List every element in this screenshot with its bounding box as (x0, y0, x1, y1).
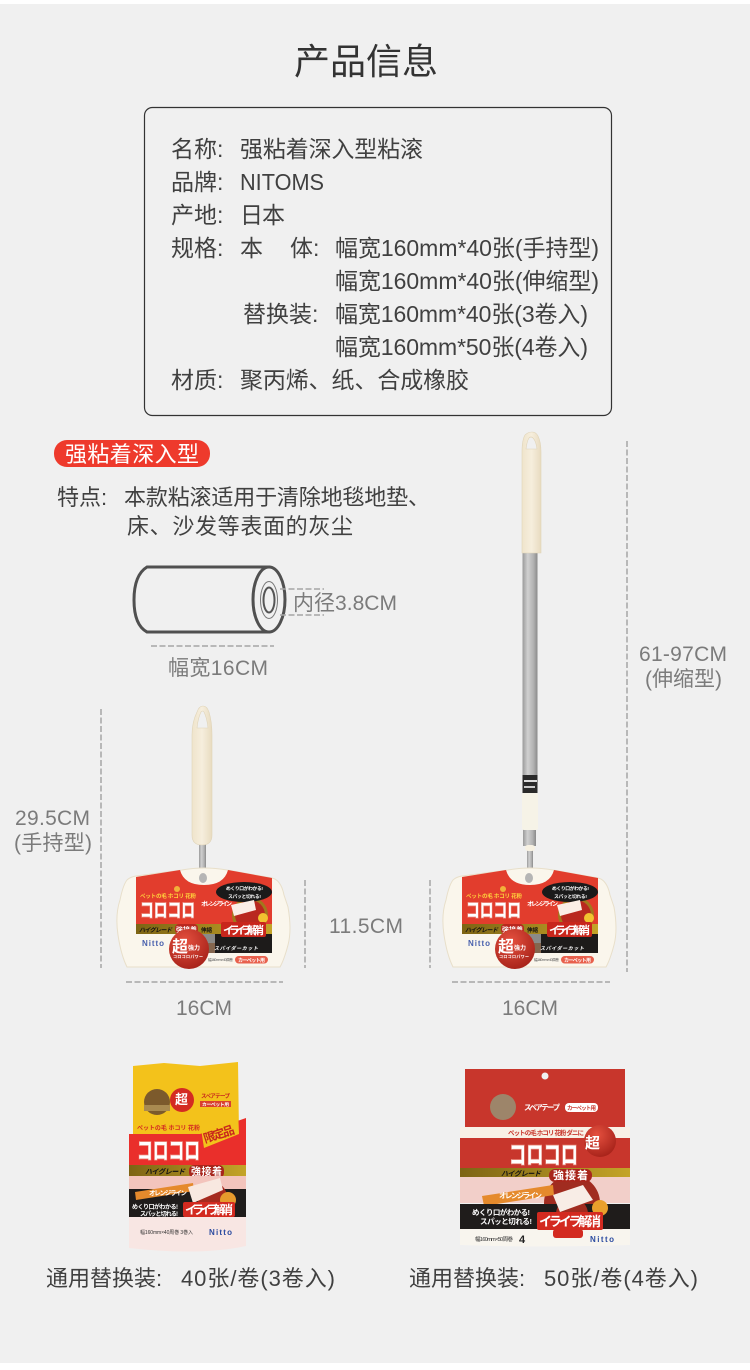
row: specification, body (171, 235, 599, 294)
row: specification, body: 幅宽160mm*40张(伸缩型) (335, 268, 599, 294)
label: roll width: 幅宽16CM (168, 657, 268, 680)
roller head with label: コロコロ (466, 900, 521, 922)
panel: product information (144, 108, 612, 416)
roller head with label: スパイダーカット (214, 945, 258, 952)
roller head with label: ペットの毛 ホコリ 花粉 (466, 892, 522, 900)
roller head with label: ペットの毛 ホコリ 花粉 (140, 892, 196, 900)
label: inner diameter: 内径3.8CM (293, 592, 397, 615)
product: 4-roll refill pack: 超 (585, 1134, 600, 1152)
product: 3-roll refill pack: スパッと切れる! (140, 1211, 178, 1218)
telescopic pole (522, 432, 541, 872)
product: 3-roll refill pack: Nitto (209, 1228, 232, 1237)
product: 3-roll refill pack (129, 1062, 246, 1252)
roller head with label: 伸縮 (201, 926, 212, 934)
row: specification, body: 本 (240, 235, 263, 261)
row: origin: 日本 (240, 202, 285, 228)
caption: 3-roll refill: 通用替换装 (46, 1266, 156, 1291)
dimension lines: handheld roller (101, 709, 305, 982)
product: 3-roll refill pack: ハイグレード (145, 1167, 186, 1176)
roller head with label: スパイダーカット (540, 945, 584, 952)
label: handheld height: (手持型) (14, 832, 92, 855)
product: 3-roll refill pack: ペットの毛 ホコリ 花粉 (137, 1124, 200, 1132)
product: 4-roll refill pack: カーペット用 (567, 1105, 596, 1112)
product: 4-roll refill pack: イライラ解消 (539, 1214, 601, 1229)
product: 4-roll refill pack (460, 1069, 630, 1246)
roller head with label: Nitto (468, 939, 490, 948)
roller head with label: 超 (172, 938, 188, 956)
product: 3-roll refill pack: 限定品 (201, 1122, 236, 1146)
roller head with label: 強接着 (176, 925, 197, 934)
product: 3-roll refill pack: オレンジライン (149, 1189, 188, 1197)
product: 3-roll refill pack: 幅160mm×40周巻 3巻入 (140, 1229, 193, 1236)
product: 4-roll refill pack: 幅160mm×50周巻 (475, 1235, 513, 1243)
roller head with label: スパッと切れる! (554, 893, 587, 900)
roller head with label: イライラ解消 (549, 923, 590, 937)
dimension lines: telescopic roller (430, 441, 627, 982)
caption: 4-roll refill: 通用替换装 (409, 1266, 519, 1291)
label: telescopic head width: 16CM (502, 997, 558, 1020)
text block: features: 本款粘滚适用于清除地毯地垫、 (124, 485, 430, 510)
row: brand (171, 169, 324, 195)
row: name: 强粘着深入型粘滚 (240, 136, 423, 162)
telescopic roller (443, 432, 616, 969)
roller head with label: ハイグレード (465, 926, 499, 934)
label: handheld height: 29.5CM (15, 807, 90, 830)
label: telescopic height: 61-97CM (639, 643, 727, 666)
title: 产品信息 (294, 41, 438, 82)
caption: 4-roll refill: : (519, 1266, 525, 1291)
roller head with label: 強力 (514, 944, 526, 952)
row: origin (171, 202, 285, 228)
roller head with label (117, 868, 290, 969)
roller head with label: 強力 (188, 944, 200, 952)
roller head with label: 伸縮 (527, 926, 538, 934)
product: 4-roll refill pack: ハイグレード (501, 1169, 542, 1178)
roller head with label: ハイグレード (139, 926, 173, 934)
product: 4-roll refill pack: コロコロ (509, 1140, 578, 1170)
handle (192, 706, 212, 872)
row: specification, refill: 幅宽160mm*40张(3卷入) (335, 301, 588, 327)
product: 3-roll refill pack: スペアテープ (201, 1093, 230, 1100)
row: specification, refill: 替换装: (243, 301, 318, 327)
roller head with label: めくり口がわかる! (552, 885, 589, 892)
row: specification, refill: 幅宽160mm*50张(4卷入) (335, 334, 588, 360)
roller head with label: 強接着 (502, 925, 523, 934)
row: brand: 品牌: (171, 169, 223, 195)
product: 4-roll refill pack: 4 (519, 1234, 526, 1246)
caption: 4-roll refill (409, 1266, 698, 1291)
row: specification, body: 体: (290, 235, 319, 261)
roller head with label: イライラ解消 (223, 923, 264, 937)
roller head with label: コロコロ (140, 900, 195, 922)
product: 4-roll refill pack: スパッと切れる! (480, 1216, 532, 1226)
roller head with label: 幅160mm×40周巻 (534, 957, 559, 962)
product: 4-roll refill pack: スペアテープ (524, 1103, 560, 1112)
caption: 3-roll refill (46, 1266, 335, 1291)
product: 4-roll refill pack: 強接着 (553, 1168, 588, 1182)
roller head with label: カーペット用 (238, 957, 265, 964)
label: handheld height (14, 807, 92, 855)
text block: features: 特点: (57, 485, 107, 510)
product: 3-roll refill pack: 超 (175, 1092, 188, 1107)
text block: features (57, 485, 430, 539)
text block: features: 床、沙发等表面的灰尘 (127, 514, 353, 539)
product: 4-roll refill pack: ペットの毛 ホコリ 花粉 ダニに (508, 1128, 584, 1137)
label: handheld head width: 16CM (176, 997, 232, 1020)
roller head with label: オレンジライン (527, 901, 558, 908)
caption: 3-roll refill: : (156, 1266, 162, 1291)
row: material: 聚丙烯、纸、合成橡胶 (240, 367, 469, 393)
row: brand: NITOMS (240, 169, 324, 195)
badge: product type: 强粘着深入型 (65, 442, 199, 467)
roller head with label: 超 (498, 938, 514, 956)
label: telescopic height (639, 643, 727, 691)
row: name: 名称: (171, 136, 223, 162)
product: 3-roll refill pack: 強接着 (191, 1165, 222, 1178)
product: 4-roll refill pack: めくり口がわかる! (472, 1207, 530, 1217)
row: material: 材质: (171, 367, 223, 393)
product: 3-roll refill pack: イライラ解消 (185, 1202, 233, 1217)
caption: 3-roll refill: 40张/卷(3卷入) (181, 1266, 335, 1291)
row: specification, refill (243, 301, 588, 360)
handheld roller (117, 706, 290, 969)
roller head with label: オレンジライン (201, 901, 232, 908)
caption: 4-roll refill: 50张/卷(4卷入) (544, 1266, 698, 1291)
roller head with label: めくり口がわかる! (226, 885, 263, 892)
roller head with label: コロコロパワー (499, 953, 529, 959)
product: 4-roll refill pack: オレンジライン (499, 1191, 542, 1200)
roller head with label: 幅160mm×40周巻 (208, 957, 233, 962)
product: 3-roll refill pack: カーペット用 (202, 1101, 229, 1108)
label: head height: 11.5CM (329, 915, 403, 938)
product: 3-roll refill pack: めくり口がわかる! (132, 1203, 178, 1211)
row: specification, body: 幅宽160mm*40张(手持型) (335, 235, 599, 261)
product: 4-roll refill pack: Nitto (590, 1235, 614, 1244)
row: origin: 产地: (171, 202, 223, 228)
roller head with label: Nitto (142, 939, 164, 948)
roller head with label: スパッと切れる! (228, 893, 261, 900)
row: specification, body: 规格: (171, 235, 223, 261)
roller head with label: コロコロパワー (173, 953, 203, 959)
roller head with label (443, 868, 616, 969)
product: 3-roll refill pack: コロコロ (137, 1138, 200, 1165)
roller head with label: カーペット用 (564, 957, 591, 964)
icon: tape roll diagram (134, 567, 324, 646)
label: telescopic height: (伸缩型) (645, 668, 722, 691)
